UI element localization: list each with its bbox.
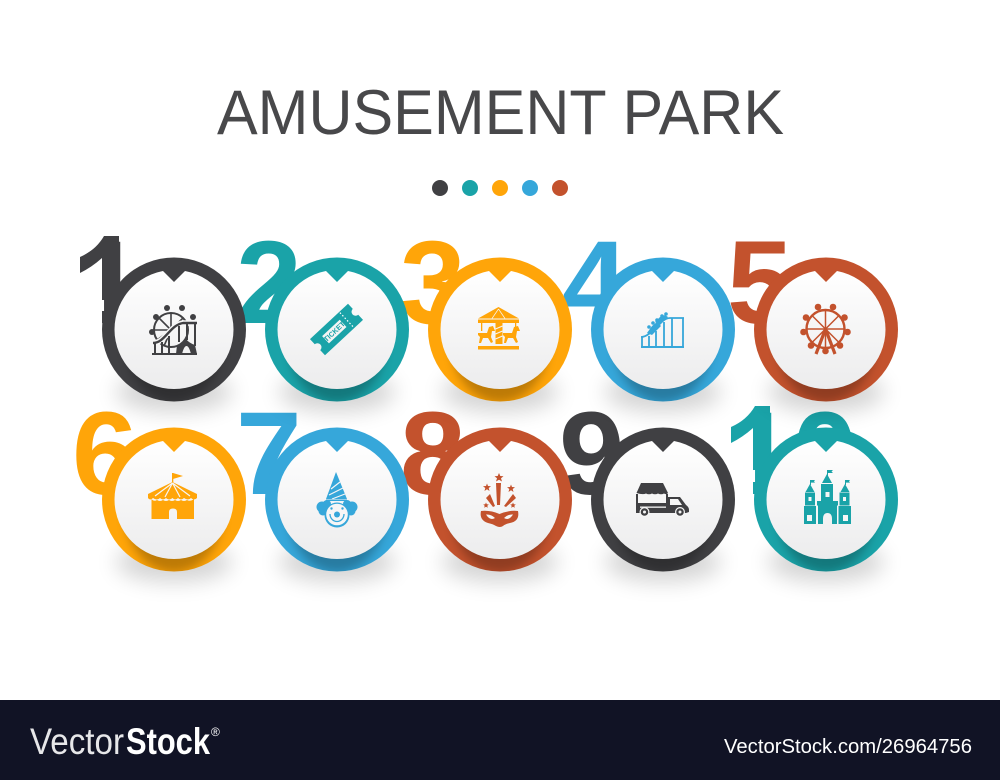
footer logo: Stock [126,721,210,762]
large step numbers: 2 [236,217,302,349]
step 9: food truck [591,428,735,572]
step 3: carousel [428,258,572,402]
drop shadows under rings [116,372,884,582]
icon: carousel [478,307,520,350]
footer logo: ® [211,725,220,739]
footer logo: Vector [30,721,124,762]
step 7: clown [265,428,409,572]
large step numbers: 9 [559,388,625,520]
large step numbers: 1 [76,217,142,349]
step 5: ferris wheel [754,258,898,402]
icon: ferris wheel [800,304,851,354]
large step numbers [76,236,850,495]
footer logo [30,721,220,762]
icon: castle [804,470,851,524]
step 2: ticket [265,258,409,402]
large step numbers: 4 [562,217,628,349]
footer image id: VectorStock.com/26964756 [724,736,972,758]
step 4: roller coaster [591,258,735,402]
decorative colour dots [432,180,568,196]
large step numbers: 1 [728,388,793,520]
icon: ticket: TICKET [322,319,347,344]
icon: park [149,305,197,354]
large step numbers: 6 [72,388,138,520]
icon: clown [316,472,358,528]
step 1: ferris wheel and coaster [102,258,246,402]
icon: mask [481,473,518,527]
title: AMUSEMENT PARK [217,78,784,148]
footer bar [0,700,1000,780]
large step numbers: 5 [727,217,793,349]
large step numbers: 0 [792,388,858,520]
large step numbers: 7 [236,388,302,520]
icon: truck [636,483,689,517]
step 8: mask with fireworks [428,428,572,572]
large step numbers: 8 [400,388,466,520]
step 6: circus tent [102,428,246,572]
icon: ticket [310,304,363,355]
step 10: castle [754,428,898,572]
icon: tent [148,473,197,519]
icon: coaster [641,312,684,347]
large step numbers: 3 [400,217,466,349]
